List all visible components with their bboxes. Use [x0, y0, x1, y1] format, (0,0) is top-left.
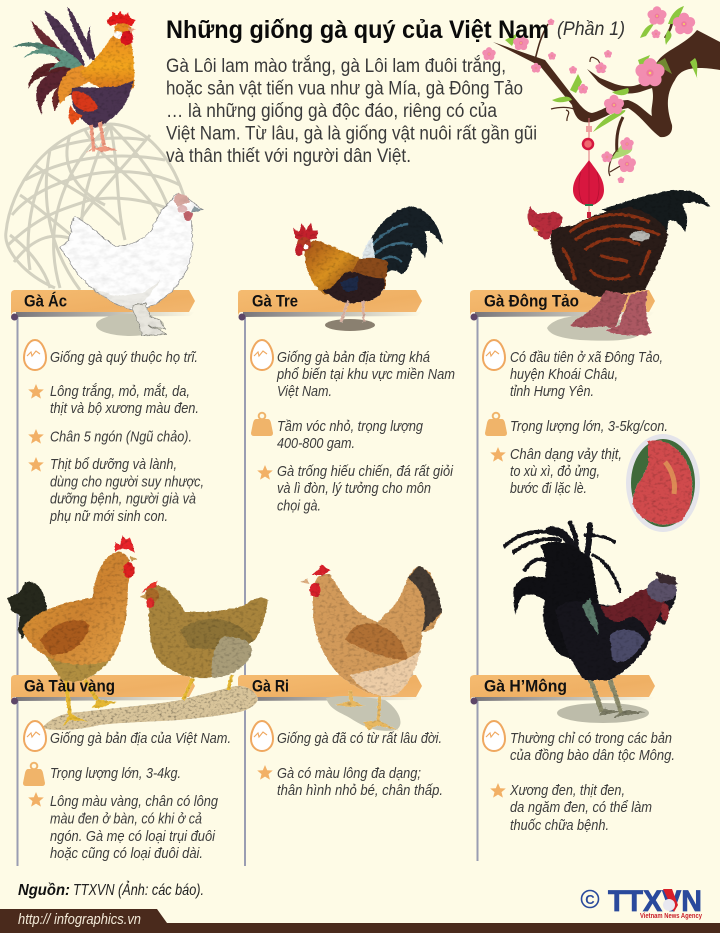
Gà Tàu vàng facts: ngón. Gà mẹ có loại trụi đuôi — [50, 828, 216, 845]
Gà H'Mông facts: thuốc chữa bệnh. — [510, 817, 609, 834]
Gà Đông Tảo facts: huyện Khoái Châu, — [510, 366, 618, 383]
intro text: và thân thiết với người dân Việt. — [166, 146, 411, 167]
Gà Tàu vàng facts: hoặc cũng có loại đuôi dài. — [50, 845, 203, 862]
TTXVN logo: TTXVN — [608, 885, 702, 918]
source line: Nguồn: — [18, 882, 70, 899]
Gà Tre facts: Gà trống hiếu chiến, đá rất giỏi — [277, 463, 454, 480]
banner shape: Gà Tàu vàng — [11, 675, 195, 704]
photo: Gà Tre rooster — [293, 206, 443, 322]
Gà Đông Tảo facts: Trọng lượng lớn, 3-5kg/con. — [510, 418, 668, 435]
Gà Tàu vàng facts: Trọng lượng lớn, 3-4kg. — [50, 765, 181, 782]
Gà Tre facts: phổ biến tại khu vực miền Nam — [276, 366, 455, 383]
title: (Phần 1) — [557, 19, 625, 40]
Gà Tàu vàng facts: màu đen ở bàn, có khi ở cả — [50, 810, 202, 828]
ground shadow under Gà Đông Tảo — [547, 316, 642, 341]
hay ground — [42, 686, 258, 730]
banner: Gà Ri — [238, 675, 422, 704]
footer band with URL — [0, 909, 720, 933]
intro text — [166, 55, 537, 167]
label: Gà Tàu vàng: Gà Tàu vàng — [24, 676, 115, 696]
Gà Tàu vàng facts: Giống gà bản địa của Việt Nam. — [50, 730, 231, 747]
Gà Đông Tảo facts: tỉnh Hưng Yên. — [510, 383, 594, 400]
Gà Tre facts: chọi gà. — [277, 498, 321, 514]
Gà Tre facts: Giống gà bản địa từng khá — [277, 349, 430, 366]
ground shadow under Gà Ri — [326, 696, 400, 731]
Gà Tre facts — [251, 340, 455, 514]
photo: Gà Tàu vàng rooster — [7, 535, 137, 727]
rooster on basket — [12, 6, 136, 155]
Gà Tre facts: và lì đòn, lý tưởng cho môn — [277, 480, 431, 497]
Gà Tre facts: Việt Nam. — [277, 383, 332, 400]
Gà Tre facts: Tầm vóc nhỏ, trọng lượng — [277, 418, 424, 435]
banner: Gà Ác — [11, 290, 195, 320]
source line: TTXVN (Ảnh: các báo). — [73, 880, 204, 899]
photo: Gà Tàu vàng hen — [140, 580, 268, 700]
Gà H'Mông facts: của đồng bào dân tộc Mông. — [510, 747, 675, 764]
Gà Tàu vàng facts: Lông màu vàng, chân có lông — [50, 793, 219, 810]
banner: Gà Ác: Gà Ác — [24, 292, 67, 310]
basket illustration — [6, 124, 185, 290]
hanging lantern — [573, 118, 604, 218]
Gà H'Mông facts — [483, 721, 675, 834]
plum blossom branch — [482, 6, 720, 183]
Gà Ác facts: Giống gà quý thuộc họ trĩ. — [50, 349, 198, 366]
banner: Gà Ri: Gà Ri — [252, 676, 289, 696]
Gà Ác facts: dùng cho người suy nhược, — [50, 474, 204, 490]
Gà Ri facts — [251, 721, 443, 799]
Gà Ác facts: Lông trắng, mỏ, mắt, da, — [50, 383, 190, 400]
Gà Ác facts: thịt và bộ xương màu đen. — [50, 400, 199, 417]
ground under Gà Tre — [325, 319, 375, 331]
intro text: hoặc sản vật tiến vua như gà Mía, gà Đông Tảo — [166, 78, 523, 100]
intro text: … là những giống gà độc đáo, riêng có của — [166, 101, 497, 122]
Gà Đông Tảo facts: Chân dạng vảy thịt, — [510, 446, 622, 463]
Gà H'Mông facts: Thường chỉ có trong các bản — [510, 730, 672, 747]
footer band with URL: http:// infographics.vn — [18, 911, 141, 928]
Gà Ri facts: Giống gà đã có từ rất lâu đời. — [277, 730, 442, 747]
Gà Ri facts: Gà có màu lông đa dạng; — [277, 765, 421, 782]
photo: white Gà Ác hen — [60, 193, 203, 335]
Gà H'Mông facts: Xương đen, thịt đen, — [509, 782, 625, 799]
intro text: Gà Lôi lam mào trắng, gà Lôi lam đuôi trắng, — [166, 55, 506, 77]
Gà Đông Tảo facts: to xù xì, đỏ ửng, — [510, 463, 600, 480]
banner: Gà Tre: Gà Tre — [252, 292, 298, 310]
banner: Gà Đông Tảo — [470, 290, 655, 320]
banner: Gà H'Mông: Gà H’Mông — [484, 676, 567, 696]
banner: Gà H'Mông — [470, 675, 655, 704]
Gà Ác facts: Chân 5 ngón (Ngũ chảo). — [50, 428, 192, 446]
photo: scaly foot inset — [626, 434, 700, 532]
title: Những giống gà quý của Việt Nam — [166, 16, 549, 44]
Gà Ác facts: phụ nữ mới sinh con. — [49, 508, 168, 525]
intro text: Việt Nam. Từ lâu, gà là giống vật nuôi rất gần gũi — [166, 124, 537, 144]
ground shadow under Gà Ác — [96, 314, 164, 336]
Gà Ri facts: thân hình nhỏ bé, chân thấp. — [277, 782, 443, 799]
Gà Tre facts: 400-800 gam. — [277, 435, 355, 452]
Gà Đông Tảo facts: bước đi lặc lè. — [510, 480, 587, 497]
column rules — [18, 316, 478, 866]
Gà Đông Tảo facts — [483, 340, 668, 497]
ground shadow under Gà H'Mông — [557, 703, 649, 723]
banner: Gà Đông Tảo: Gà Đông Tảo — [484, 292, 579, 310]
Gà H'Mông facts: da ngăm đen, có thể làm — [510, 799, 652, 816]
Gà Ác facts: dưỡng bệnh, người già và — [50, 490, 196, 508]
Gà Tàu vàng facts — [23, 721, 231, 862]
TTXVN logo: Vietnam News Agency — [640, 913, 702, 920]
source line — [18, 880, 204, 899]
photo: Gà Đông Tảo rooster — [528, 190, 710, 336]
TTXVN logo: C — [585, 892, 595, 907]
Gà Đông Tảo facts: Có đầu tiên ở xã Đông Tảo, — [510, 349, 663, 366]
banner: Gà Tre — [238, 290, 422, 320]
photo: Gà H'Mông rooster — [505, 523, 678, 718]
Gà Ác facts: Thịt bổ dưỡng và lành, — [50, 456, 177, 473]
photo: Gà Ri hen — [300, 564, 442, 730]
Gà Ác facts — [24, 340, 204, 525]
